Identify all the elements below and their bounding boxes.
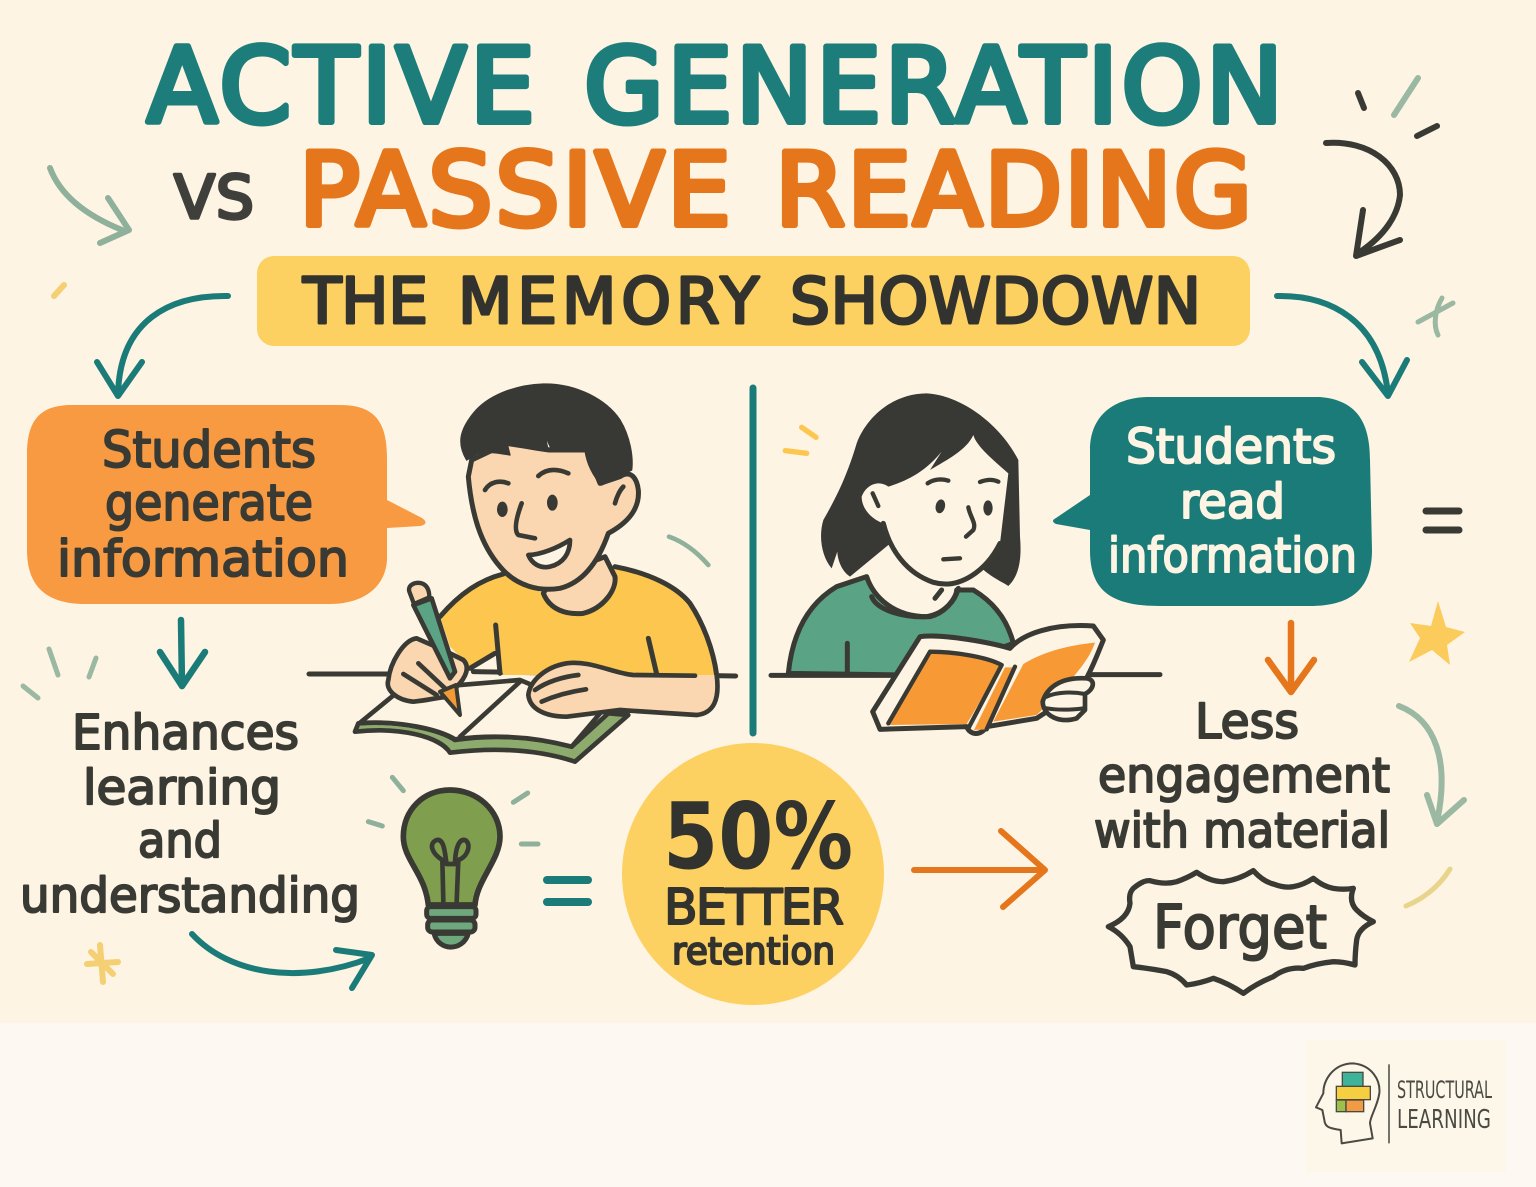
stat circle: 50% better retention: 50% [663,783,853,890]
mark: sage cross [1418,298,1453,335]
title: passive reading: READING [775,131,1252,249]
mark: small yellow dash [54,285,64,296]
text: enhances learning and understanding [20,705,360,924]
star: yellow [1409,601,1465,665]
stat circle: 50% better retention: retention [672,930,835,973]
sparks: top right [1358,78,1437,136]
stat circle: 50% better retention: BETTER [664,879,844,936]
bubble: students generate information: information [57,530,349,588]
mouth [528,540,570,567]
divider [750,388,756,733]
hair [461,384,632,485]
stat circle: 50% better retention [622,743,884,1005]
face [862,435,1008,585]
book [355,713,628,762]
text: less engagement with material: Less [1195,694,1299,750]
arrow: orange down right [1268,623,1314,692]
logo: structural learning: LEARNING [1397,1105,1491,1135]
hand [1043,678,1093,720]
table line [771,667,1160,683]
left hand [388,638,467,702]
mark: yellow tick [1406,869,1450,906]
title: passive reading: PASSIVE [299,131,731,249]
title: passive reading [299,131,1252,249]
illustration: girl reading [771,393,1160,734]
bubble: students generate information: generate [105,474,313,532]
eyes [934,499,946,514]
text: less engagement with material [1094,694,1390,859]
title: vs: VS [174,163,254,233]
illustration: boy writing [309,384,736,762]
head outline [1316,1063,1379,1143]
text: enhances learning and understanding: learning [83,760,281,816]
neck [543,557,615,614]
right arm and hand [528,663,717,717]
brows, nose, ear [485,470,623,538]
equals sign: teal [547,880,588,902]
bubble: students read information: information [1108,528,1357,584]
yellow sparks [785,427,816,453]
shirt [440,567,717,675]
banner: the memory showdown [257,256,1250,346]
bubble: students read information: read [1180,474,1285,530]
arrow: teal down left [160,620,205,686]
eyes [497,502,508,517]
title: active generation: GENERATION [584,27,1283,147]
bubble: students generate information: Students [102,421,316,479]
banner: the memory showdown: SHOWDOWN [790,265,1201,338]
arrow: teal swoosh to bulb [192,934,372,988]
divider [1386,1064,1391,1143]
text: less engagement with material: with material [1094,803,1390,859]
title: active generation [147,27,1283,147]
equals sign: right [1426,511,1459,530]
blocks [1342,1072,1363,1087]
text: enhances learning and understanding: Enhances [72,705,299,761]
table line [309,672,736,676]
arrow: dark top right [1326,143,1400,256]
shirt [788,577,1013,675]
arrow: teal to right bubble [1277,296,1407,396]
sparks: left [23,649,96,698]
icon: light bulb [368,777,538,947]
banner: the memory showdown: THE [302,265,428,338]
arrow: sage right [1399,706,1464,824]
book [873,626,1103,734]
bubble: students read information [1053,397,1372,606]
arrow: orange to right [914,831,1045,907]
arrow: sage top left [50,168,129,243]
green tick [669,537,708,565]
brows, nose, mouth, ear [873,479,998,559]
bubble: students generate information [27,405,426,604]
bubble: students read information: Students [1126,419,1336,475]
title: active generation: ACTIVE [147,27,535,147]
pencil [413,598,455,678]
arrow: teal to left bubble [97,296,228,396]
banner: the memory showdown: MEMORY [458,265,760,338]
text: less engagement with material: engagement [1098,748,1390,804]
text: enhances learning and understanding: understanding [20,868,360,924]
mark: small yellow star left [87,945,118,982]
text: enhances learning and understanding: and [138,813,222,869]
burst: forget: Forget [1153,893,1327,963]
hair [821,393,1021,586]
burst: forget [1108,871,1373,993]
logo: structural learning [1306,1040,1506,1172]
face [468,443,638,589]
